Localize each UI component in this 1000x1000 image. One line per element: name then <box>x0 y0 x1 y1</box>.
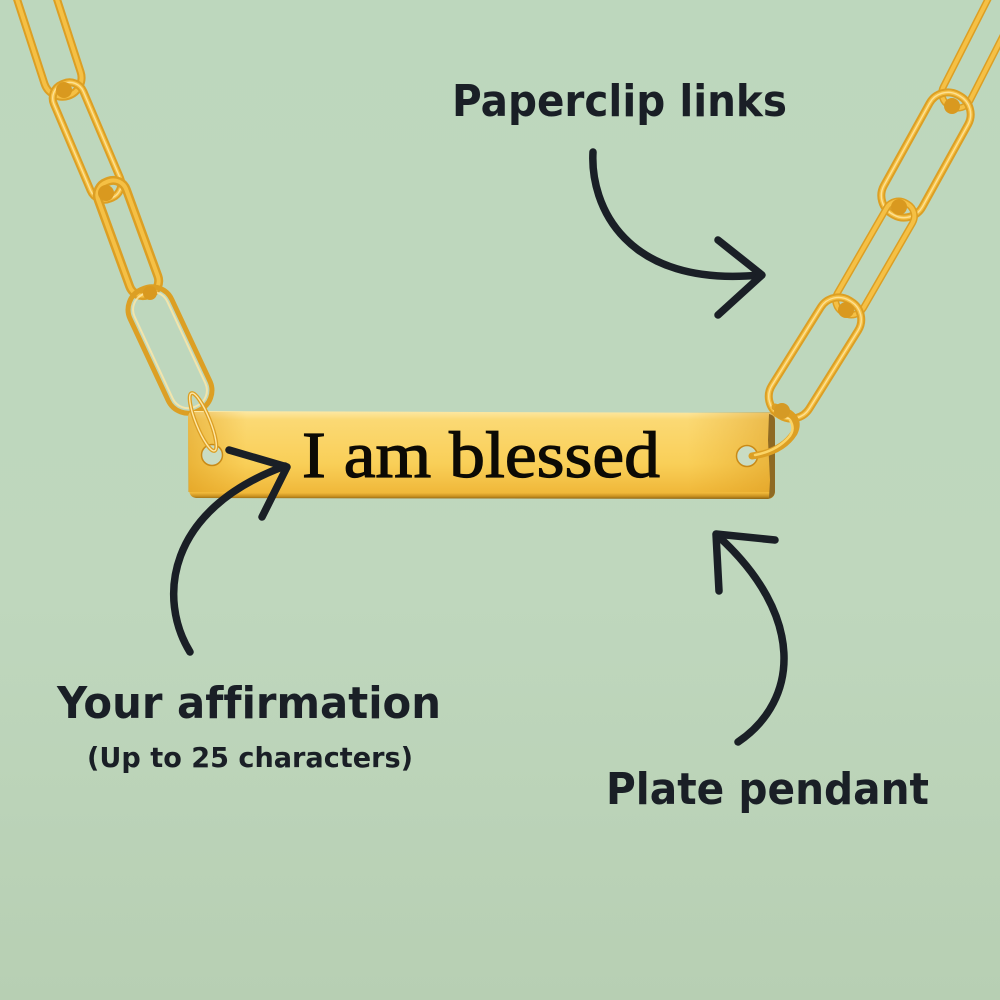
jump ring: right <box>752 403 796 456</box>
knot: left link joints <box>56 82 157 300</box>
knot: right link joints <box>838 98 960 318</box>
link: left 1 <box>10 0 86 102</box>
plate body <box>188 411 775 499</box>
left hole <box>202 444 222 466</box>
pendant plate <box>188 411 775 499</box>
link: left 2 <box>48 78 126 204</box>
engraved text: I am blessed <box>302 419 660 492</box>
left chain <box>10 0 219 420</box>
label: paperclip links: Paperclip links <box>452 76 787 127</box>
label: your affirmation: Your affirmation <box>56 678 441 729</box>
right hole <box>736 446 758 466</box>
link: right 2 <box>874 85 978 225</box>
link: right 3 <box>831 196 919 320</box>
arrow: affirmation <box>174 450 287 652</box>
link: right 1 <box>937 0 1000 113</box>
plate right edge <box>768 414 775 498</box>
label: plate pendant: Plate pendant <box>606 764 929 815</box>
link: left 4 <box>121 280 219 420</box>
right chain <box>761 0 1000 426</box>
arrow: paperclip links <box>593 152 762 315</box>
jump ring: left <box>185 391 221 453</box>
plate side shading <box>188 412 775 492</box>
link: left 3 <box>93 176 163 300</box>
link: right 4 <box>761 290 869 426</box>
arrow: plate pendant <box>716 534 784 742</box>
label: up to 25 characters: (Up to 25 characters) <box>87 741 413 774</box>
